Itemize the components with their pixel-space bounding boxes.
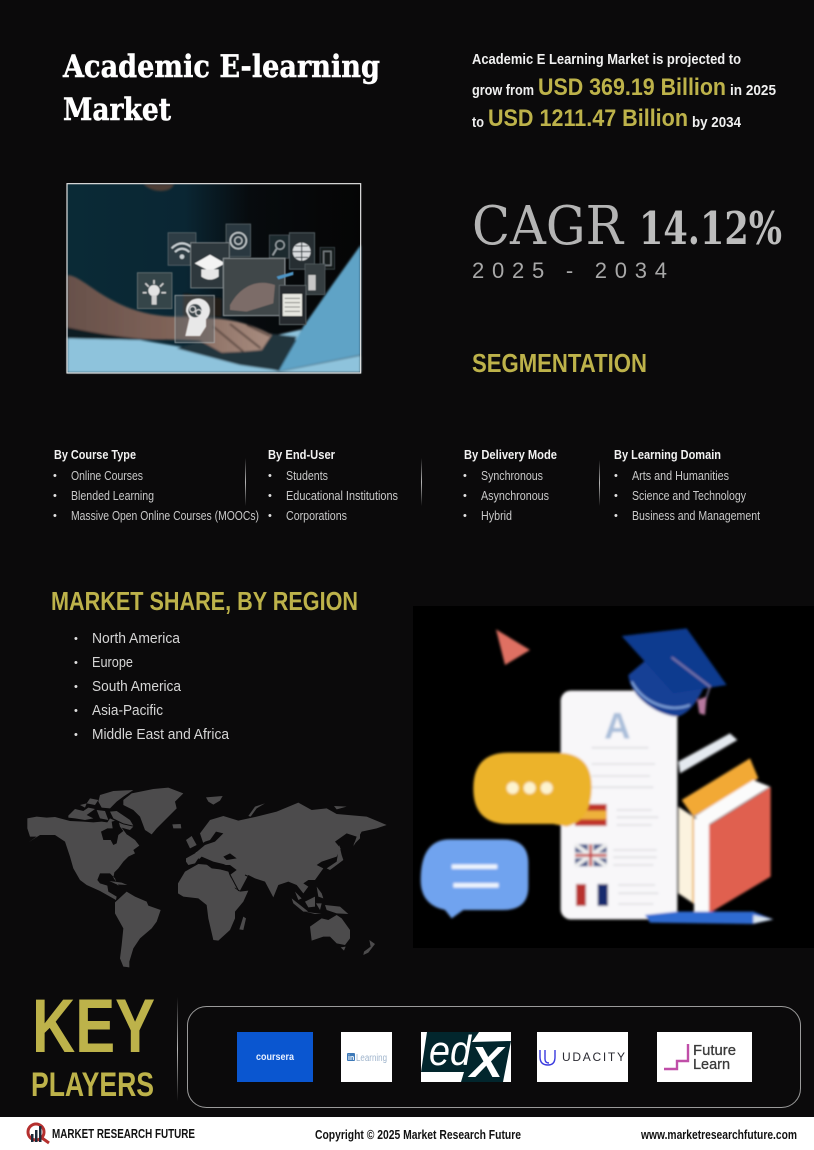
brand name: MARKET RESEARCH FUTURE — [52, 1127, 195, 1141]
copyright: Copyright © 2025 Market Research Future — [315, 1128, 521, 1142]
key players panel — [188, 1006, 800, 1108]
segment: by delivery mode: • — [463, 470, 467, 482]
world map — [27, 788, 387, 967]
segment: by end-user: • — [268, 470, 272, 482]
logo: edx — [421, 1027, 511, 1087]
segment: by delivery mode: Hybrid — [481, 509, 512, 523]
segment: by delivery mode: By Delivery Mode — [464, 447, 557, 462]
segmentation heading: SEGMENTATION — [472, 348, 647, 378]
segment: by course type: • — [53, 510, 57, 522]
segment: by course type: Online Courses — [71, 469, 143, 483]
logo: edx: X — [467, 1038, 506, 1087]
segment: by course type: • — [53, 470, 57, 482]
segment: by delivery mode: Asynchronous — [481, 489, 549, 503]
segment: by learning domain: • — [614, 510, 618, 522]
logo: coursera: coursera — [256, 1052, 294, 1063]
market projection statement: Academic E Learning Market is projected to — [472, 51, 741, 68]
segment: by learning domain: Science and Technology — [632, 489, 747, 503]
logo: futurelearn: Learn — [693, 1056, 730, 1073]
market projection statement — [472, 51, 776, 132]
segment: by delivery mode: Synchronous — [481, 469, 543, 483]
logo: coursera — [237, 1032, 313, 1082]
segment: by learning domain: By Learning Domain — [614, 447, 721, 462]
title: Academic E-learning — [62, 49, 380, 85]
footer — [0, 1117, 814, 1150]
key players heading: KEY — [32, 984, 155, 1069]
market projection statement: by 2034 — [692, 114, 742, 131]
logo: udacity: UDACITY — [562, 1050, 625, 1064]
segment: by end-user: By End-User — [268, 447, 335, 462]
logo: edx: ed — [429, 1027, 472, 1074]
market projection statement: USD 369.19 Billion — [538, 74, 726, 101]
CAGR figure — [472, 196, 782, 257]
CAGR figure: CAGR — [472, 196, 625, 257]
key players heading — [31, 984, 155, 1104]
region list: Asia-Pacific — [92, 702, 163, 719]
logo: udacity — [537, 1032, 628, 1082]
photo: hands on laptop with e-learning icons — [67, 184, 361, 373]
region list: • — [74, 705, 78, 717]
logo: linkedin learning — [341, 1032, 392, 1082]
segment: by course type: Massive Open Online Courses (MOOCs) — [71, 509, 259, 523]
logo: linkedin learning: Learning — [356, 1053, 387, 1064]
segment: by learning domain — [614, 447, 760, 523]
region list: South America — [92, 678, 182, 695]
segment: by learning domain: Arts and Humanities — [632, 469, 729, 483]
region list: Europe — [92, 654, 133, 671]
segment: by learning domain: Business and Management — [632, 509, 760, 523]
title: Market — [63, 92, 172, 128]
region list: • — [74, 729, 78, 741]
segment: by course type — [53, 447, 259, 523]
illustration: languages document, books and chat bubbles — [413, 606, 814, 948]
market projection statement: to — [472, 114, 484, 131]
logo: linkedin learning: in — [348, 1055, 354, 1062]
market projection statement: USD 1211.47 Billion — [488, 105, 688, 132]
region list: • — [74, 633, 78, 645]
segment: by course type: • — [53, 490, 57, 502]
CAGR period: 2025 - 2034 — [472, 258, 667, 283]
segment: by learning domain: • — [614, 470, 618, 482]
segment: by delivery mode: • — [463, 510, 467, 522]
market projection statement: in 2025 — [730, 82, 776, 99]
illustration: languages document, books and chat bubbles: A — [604, 705, 631, 746]
title — [62, 49, 380, 128]
key players heading: PLAYERS — [31, 1066, 154, 1104]
segment: by end-user: Students — [286, 469, 328, 483]
segment: by end-user: • — [268, 490, 272, 502]
segment: by end-user: • — [268, 510, 272, 522]
segment: by delivery mode: • — [463, 490, 467, 502]
segment: by delivery mode — [463, 447, 557, 523]
segment: by end-user: Educational Institutions — [286, 489, 398, 503]
region list: Middle East and Africa — [92, 726, 230, 743]
region list: • — [74, 657, 78, 669]
segment: by end-user: Corporations — [286, 509, 347, 523]
market share heading: MARKET SHARE, BY REGION — [51, 586, 358, 616]
region list: • — [74, 681, 78, 693]
segment: by course type: Blended Learning — [71, 489, 154, 503]
market projection statement: grow from — [472, 82, 534, 99]
segment: by course type: By Course Type — [54, 447, 136, 462]
segment: by learning domain: • — [614, 490, 618, 502]
logo: futurelearn — [657, 1032, 752, 1082]
region list: North America — [92, 630, 181, 647]
segment: by end-user — [268, 447, 398, 523]
logo: futurelearn: Future — [693, 1042, 736, 1059]
icon: market research future logo — [28, 1124, 49, 1143]
region list — [74, 630, 230, 743]
